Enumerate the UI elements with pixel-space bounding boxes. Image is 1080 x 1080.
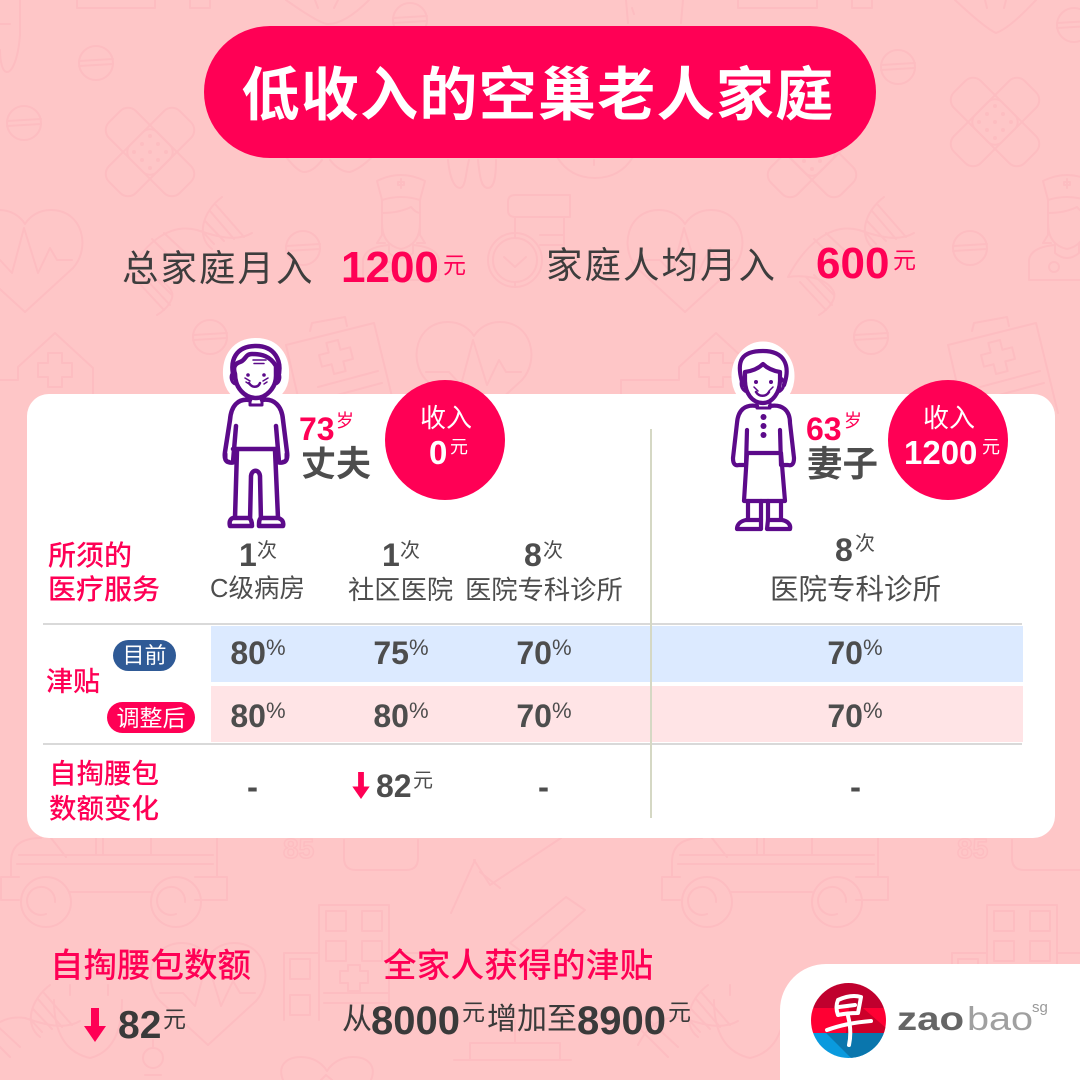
wife income circle: 1200 [904, 434, 977, 471]
footer: out of pocket total: 元 [163, 1006, 186, 1032]
husband income circle: 0 [429, 434, 447, 471]
husband label: 丈夫 [301, 445, 371, 484]
out of pocket values: - [247, 768, 258, 805]
clock [488, 195, 570, 287]
badge: adjusted [107, 702, 195, 733]
out of pocket values: - [850, 768, 861, 805]
logo: zaobao [811, 983, 1048, 1058]
husband age [299, 411, 354, 447]
per capita income: 元 [893, 247, 916, 273]
badge: current [113, 640, 176, 671]
footer: family subsidy: 8000 [371, 999, 460, 1043]
wife age [806, 411, 862, 447]
footer: out of pocket total [50, 948, 251, 1047]
adjusted subsidy values: 70% [827, 698, 883, 734]
out of pocket values: 82 [376, 768, 412, 804]
adjusted subsidy values [230, 698, 883, 734]
row label: out of pocket change: 自掏腰包 [49, 758, 159, 789]
logo: zaobao: bao [967, 1000, 1033, 1037]
table rule bottom [43, 743, 1022, 745]
service: C-class ward: 次 [257, 540, 277, 562]
footer: out of pocket total: 自掏腰包数额 [50, 948, 251, 985]
service: specialist clinic: 医院专科诊所 [465, 575, 623, 605]
wife income circle: 元 [982, 437, 1000, 457]
service: community hospital: 次 [400, 540, 420, 562]
row label: required medical services: 医疗服务 [48, 574, 160, 605]
current subsidy values: 80% [230, 635, 286, 671]
current subsidy values [230, 635, 883, 671]
total household income: 1200 [341, 243, 439, 292]
row label: out of pocket change: 数额变化 [49, 793, 159, 824]
current subsidy values: 70% [516, 635, 572, 671]
row highlight: adjusted subsidy [211, 686, 1023, 742]
adjusted subsidy values: 80% [373, 698, 429, 734]
badge: adjusted: 调整后 [116, 705, 186, 731]
wife label: 妻子 [807, 444, 878, 484]
service: community hospital: 1 [382, 537, 400, 573]
service: community hospital [348, 537, 453, 605]
icon: husband figure [222, 338, 290, 528]
out of pocket values: - [538, 768, 549, 805]
footer: family subsidy: 元 [462, 999, 485, 1025]
service: wife specialist clinic: 次 [855, 533, 875, 555]
service: wife specialist clinic: 医院专科诊所 [770, 574, 941, 606]
title pill [204, 26, 876, 158]
icon: down arrow [352, 772, 370, 799]
adjusted subsidy values: 80% [230, 698, 286, 734]
icon: zaobao roundel [811, 983, 886, 1058]
service: specialist clinic: 次 [543, 540, 563, 562]
column divider [650, 429, 652, 818]
footer: family subsidy: 8900 [577, 999, 666, 1043]
husband income circle: 元 [450, 437, 468, 457]
total household income: 总家庭月入 [122, 248, 314, 289]
total household income [122, 243, 466, 292]
per capita income: 600 [816, 239, 889, 288]
title pill: 低收入的空巢老人家庭 [241, 63, 834, 128]
panel: white table card [27, 394, 1055, 838]
service: community hospital: 社区医院 [348, 575, 453, 605]
footer: family subsidy [342, 948, 691, 1043]
husband income circle: 收入 [420, 403, 472, 433]
service: C-class ward [210, 537, 305, 603]
out of pocket values: 元 [413, 770, 433, 792]
footer: family subsidy: 元 [668, 999, 691, 1025]
logo panel [780, 964, 1080, 1080]
bottom fragments [54, 985, 785, 1075]
adjusted subsidy values: 70% [516, 698, 572, 734]
current subsidy values: 70% [827, 635, 883, 671]
current subsidy values: 75% [373, 635, 429, 671]
badge: current: 目前 [122, 643, 166, 668]
row label: required medical services [48, 540, 160, 605]
row label: out of pocket change [49, 758, 159, 824]
out of pocket values [247, 768, 861, 805]
service: specialist clinic: 8 [524, 537, 542, 573]
row label: subsidy: 津贴 [46, 667, 100, 697]
icon: down arrow [84, 1008, 106, 1042]
service: C-class ward: 1 [239, 537, 257, 573]
per capita income [546, 239, 916, 288]
footer: out of pocket total: 82 [118, 1004, 161, 1047]
icon: wife figure [730, 342, 796, 532]
logo: zaobao: zao [897, 1000, 964, 1037]
wife income circle: 收入 [923, 403, 975, 433]
background pattern of medical icons: 85 [283, 833, 314, 864]
row label: required medical services: 所须的 [48, 540, 132, 571]
footer: family subsidy: 从 [342, 1003, 372, 1036]
row highlight: current subsidy [211, 626, 1023, 682]
service: wife specialist clinic [770, 532, 941, 606]
wife age: 63 [806, 411, 842, 447]
husband income circle [385, 380, 505, 500]
total household income: 元 [443, 252, 466, 278]
husband age: 73 [299, 411, 335, 447]
logo: zaobao: sg [1032, 999, 1048, 1016]
service: specialist clinic [465, 537, 623, 605]
wife age: 岁 [844, 411, 862, 431]
wife income circle [888, 380, 1008, 500]
husband age: 岁 [336, 411, 354, 431]
footer: family subsidy: 增加至 [487, 1003, 577, 1036]
service: C-class ward: C级病房 [210, 575, 305, 603]
background pattern of medical icons: 85 [957, 833, 988, 864]
footer: family subsidy: 全家人获得的津贴 [383, 948, 653, 985]
service: wife specialist clinic: 8 [835, 532, 853, 568]
table rule top [43, 623, 1022, 625]
per capita income: 家庭人均月入 [546, 245, 777, 286]
